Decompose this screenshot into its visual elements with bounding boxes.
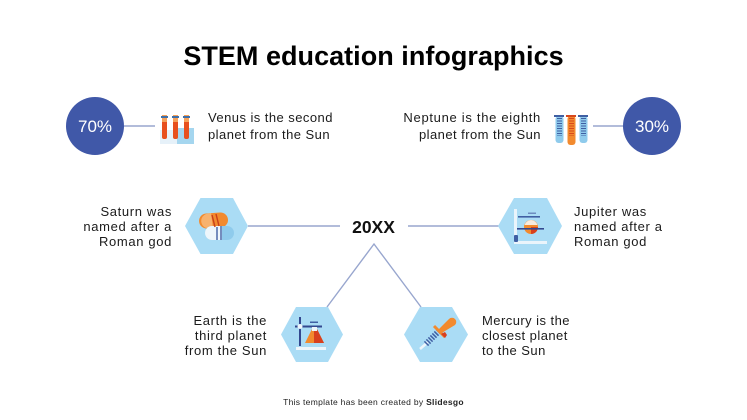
hexagon icon: dropper: [404, 307, 468, 362]
text: Mercury: Mercury is the: [482, 313, 570, 328]
badge: 30%: 30%: [635, 117, 669, 136]
title: STEM education infographics: [183, 41, 564, 71]
text: Venus: planet from the Sun: [208, 127, 330, 142]
text: Saturn: Roman god: [99, 234, 172, 249]
text: Jupiter: Jupiter was: [574, 204, 647, 219]
hexagon icon: pills: [185, 198, 248, 254]
text: Earth: [185, 313, 267, 358]
connector lines: [124, 126, 624, 307]
badge: 70%: 70%: [78, 117, 112, 136]
text: Venus: Venus is the second: [208, 110, 333, 125]
text: Jupiter: named after a: [574, 219, 663, 234]
footer credit: This template has been created by Slidesgo: [283, 397, 464, 407]
badge: 70%: [66, 97, 124, 155]
text: Saturn: Saturn was: [100, 204, 172, 219]
text: Earth: Earth is the: [193, 313, 267, 328]
text: Earth: from the Sun: [185, 343, 267, 358]
center label: 20XX: 20XX: [352, 217, 395, 237]
text: Mercury: [482, 313, 570, 358]
text: Neptune: [403, 110, 541, 142]
hexagon icon: microscope flask: [498, 198, 562, 254]
text: Neptune: planet from the Sun: [419, 127, 541, 142]
hexagon icon: flask on stand: [281, 307, 343, 362]
text: Venus: [208, 110, 333, 142]
text: Mercury: to the Sun: [482, 343, 546, 358]
icon: test tubes in water: [160, 115, 194, 144]
text: Mercury: closest planet: [482, 328, 568, 343]
badge: 30%: [623, 97, 681, 155]
text: Saturn: named after a: [83, 219, 172, 234]
text: Earth: third planet: [195, 328, 267, 343]
text: Saturn: [83, 204, 172, 249]
text: Neptune: Neptune is the eighth: [403, 110, 541, 125]
text: Jupiter: [574, 204, 663, 249]
text: Jupiter: Roman god: [574, 234, 647, 249]
icon: graduated tubes: [554, 115, 588, 145]
